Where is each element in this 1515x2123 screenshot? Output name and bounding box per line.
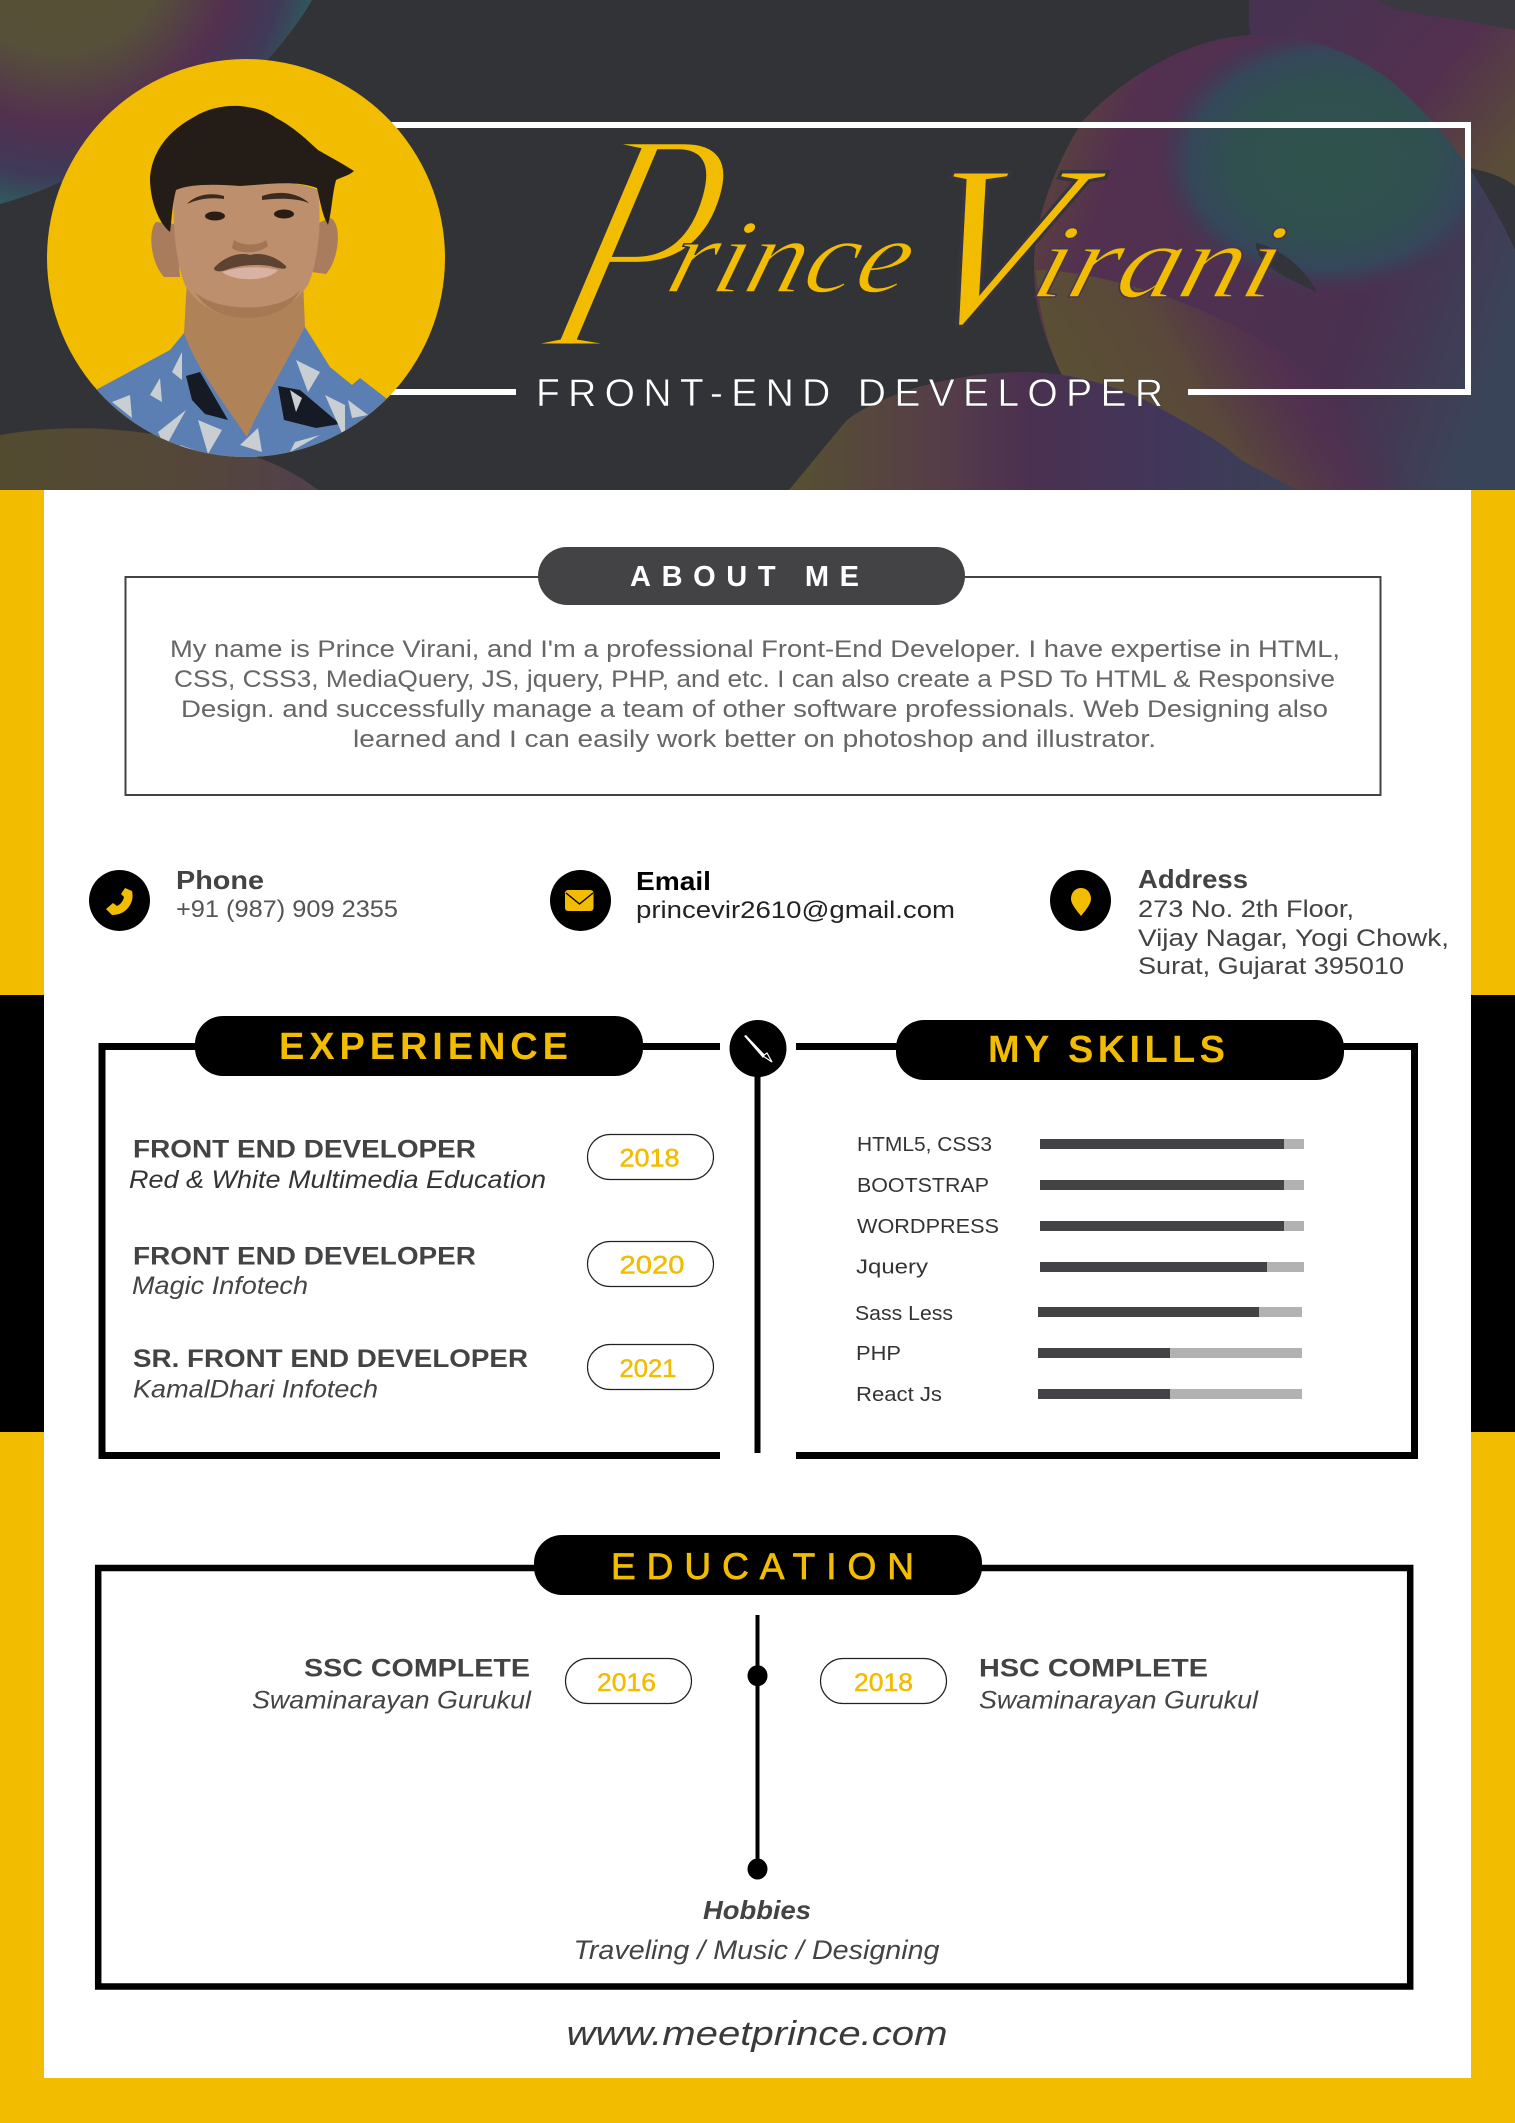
hobbies list: Traveling / Music / Designing: [574, 1935, 940, 1965]
about me paragraph: [170, 636, 1340, 753]
skill: react js: [856, 1384, 1302, 1406]
panel: about me: [126, 547, 1380, 795]
job 1: 2018: [620, 1144, 680, 1172]
skill: bootstrap: [857, 1175, 1304, 1197]
white title frame: [380, 122, 1471, 395]
blob: dark hole: [1256, 243, 1317, 292]
panel: experience: [102, 1016, 720, 1456]
shirt pattern: [112, 352, 368, 456]
nose shadow: [232, 240, 268, 252]
timeline: [748, 1615, 768, 1880]
moustache: [214, 254, 286, 271]
email label: Email: [636, 866, 711, 896]
neck: [184, 280, 305, 437]
collar shadows: [186, 372, 340, 428]
skill: wordpress: WORDPRESS: [857, 1216, 999, 1238]
contact: phone: [89, 865, 398, 931]
job 2: [132, 1242, 714, 1300]
blob: front bottom: [789, 372, 1297, 490]
blob: lower olive band: [1036, 270, 1370, 490]
chin shading: [195, 290, 300, 318]
education: ssc: Swaminarayan Gurukul: [252, 1686, 533, 1714]
ears: [151, 222, 180, 277]
skill: php: PHP: [856, 1343, 901, 1365]
skills heading: MY SKILLS: [988, 1029, 1225, 1071]
about me paragraph: CSS, CSS3, MediaQuery, JS, jquery, PHP, and etc. I can also create a PSD To HTML & Responsive: [174, 666, 1335, 693]
name in script lettering: P: [512, 66, 767, 418]
job 3: 2021: [620, 1355, 676, 1383]
job title: FRONT-END DEVELOPER: [536, 372, 1163, 415]
header banner: [0, 0, 1515, 490]
job 2: FRONT END DEVELOPER: [133, 1242, 476, 1270]
divider with pen icon: [730, 1020, 786, 1453]
name in script lettering: rince: [656, 200, 929, 316]
address lines: Surat, Gujarat 395010: [1138, 953, 1404, 980]
skill: wordpress: [857, 1216, 1304, 1238]
education: ssc: 2016: [597, 1669, 656, 1697]
skill: sass less: Sass Less: [855, 1303, 953, 1325]
education: hsc: 2018: [854, 1669, 913, 1697]
skill: html5 css3: HTML5, CSS3: [857, 1134, 992, 1156]
blob: top left: [0, 0, 312, 204]
portrait photo: [47, 59, 445, 480]
address lines: 273 No. 2th Floor,: [1138, 896, 1354, 923]
hair: [150, 106, 354, 232]
skill: php: [856, 1343, 1302, 1365]
name in script lettering: irani: [1022, 205, 1298, 321]
panel: education: [98, 1535, 1410, 1986]
about me paragraph: learned and I can easily work better on photoshop and illustrator.: [353, 726, 1156, 753]
experience heading: EXPERIENCE: [279, 1026, 568, 1068]
blob: top right: [1249, 0, 1515, 200]
icon: phone: [89, 870, 150, 931]
job 2: Magic Infotech: [132, 1272, 308, 1300]
education pill: [534, 1535, 982, 1595]
address lines: Vijay Nagar, Yogi Chowk,: [1138, 925, 1449, 952]
skill: jquery: [856, 1256, 1304, 1278]
face: [173, 180, 320, 318]
education: hsc: HSC COMPLETE: [979, 1654, 1208, 1682]
skill: html5 css3: [857, 1134, 1304, 1156]
education: ssc: [252, 1654, 692, 1714]
address lines: [1138, 896, 1449, 980]
job 1: FRONT END DEVELOPER: [133, 1136, 476, 1164]
shirt: [96, 327, 387, 457]
skill: react js: React Js: [856, 1384, 942, 1406]
job 3: KamalDhari Infotech: [133, 1376, 378, 1404]
email address: princevir2610@gmail.com: [636, 897, 955, 924]
skill: jquery: Jquery: [856, 1256, 928, 1278]
contact: address: [1050, 864, 1449, 980]
website: www.meetprince.com: [566, 2015, 948, 2053]
contact: email: [550, 866, 955, 931]
hobbies heading: Hobbies: [703, 1895, 811, 1925]
job 2: 2020: [620, 1252, 684, 1280]
phone number: +91 (987) 909 2355: [176, 896, 398, 923]
address label: Address: [1138, 864, 1248, 894]
icon: map pin: [1050, 870, 1111, 931]
lips: [222, 267, 278, 279]
skill: bootstrap: BOOTSTRAP: [857, 1175, 989, 1197]
about me paragraph: My name is Prince Virani, and I'm a professional Front-End Developer. I have expertise in HTML,: [170, 636, 1340, 663]
eyes: [205, 212, 225, 220]
job 1: Red & White Multimedia Education: [129, 1166, 546, 1194]
icon: envelope: [550, 870, 611, 931]
icon: pen brush: [730, 1020, 786, 1077]
blob: bottom left: [0, 428, 318, 490]
about me heading: ABOUT ME: [630, 561, 859, 593]
name in script lettering: V: [823, 117, 1124, 373]
panel: my skills: [796, 1020, 1414, 1456]
education heading: EDUCATION: [611, 1546, 914, 1587]
blob: main right shape: [1034, 35, 1515, 490]
eyebrows: [187, 193, 309, 204]
education: hsc: Swaminarayan Gurukul: [979, 1686, 1260, 1714]
blob: teal swirl: [1168, 39, 1477, 282]
about me pill: [538, 547, 965, 605]
education: hsc: [820, 1654, 1260, 1714]
phone label: Phone: [176, 865, 264, 895]
skills pill: [896, 1020, 1344, 1080]
skill: sass less: [855, 1303, 1302, 1325]
job 3: SR. FRONT END DEVELOPER: [133, 1345, 528, 1373]
blob: dark notch: [1471, 168, 1515, 200]
about me paragraph: Design. and successfully manage a team of other software professionals. Web Designing also: [181, 696, 1328, 723]
education: ssc: SSC COMPLETE: [304, 1654, 530, 1682]
experience pill: [195, 1016, 643, 1076]
job 3: [133, 1344, 714, 1404]
blob: top right sliver: [1378, 0, 1515, 30]
job 1: [129, 1134, 714, 1194]
